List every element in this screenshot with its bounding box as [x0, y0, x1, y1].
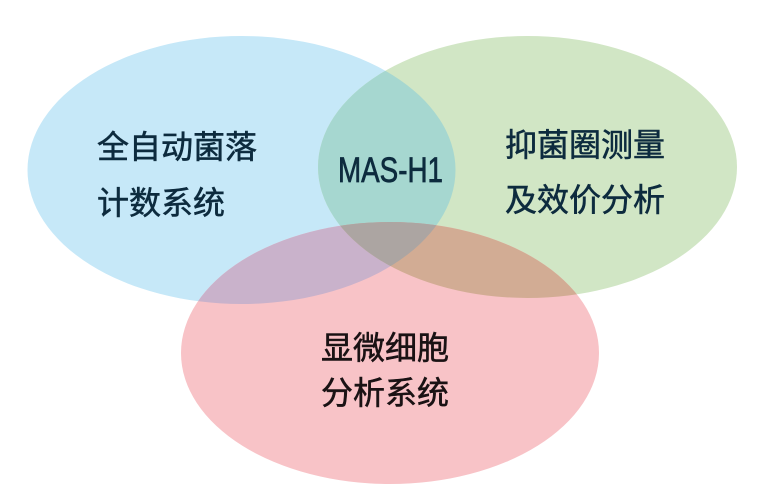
label: green circle: [505, 127, 665, 218]
overlap: green and pink: [340, 222, 577, 298]
label: blue circle: [97, 129, 257, 221]
circle: pink: [181, 222, 599, 484]
label: pink circle: 分析系统: [321, 375, 449, 411]
circle: blue: [28, 36, 456, 304]
circle: green: [318, 36, 737, 298]
label: pink circle: [321, 330, 449, 411]
label: center: MAS-H1: [338, 151, 443, 190]
label: pink circle: 显微细胞: [321, 330, 449, 366]
overlap: blue and green: [318, 70, 456, 226]
overlap: all three: [340, 222, 436, 266]
label: green circle: 抑菌圈测量: [505, 127, 665, 163]
label: green circle: 及效价分析: [505, 182, 665, 218]
overlap: blue and pink: [198, 226, 390, 304]
label: blue circle: 全自动菌落: [97, 129, 257, 165]
label: blue circle: 计数系统: [97, 185, 225, 221]
